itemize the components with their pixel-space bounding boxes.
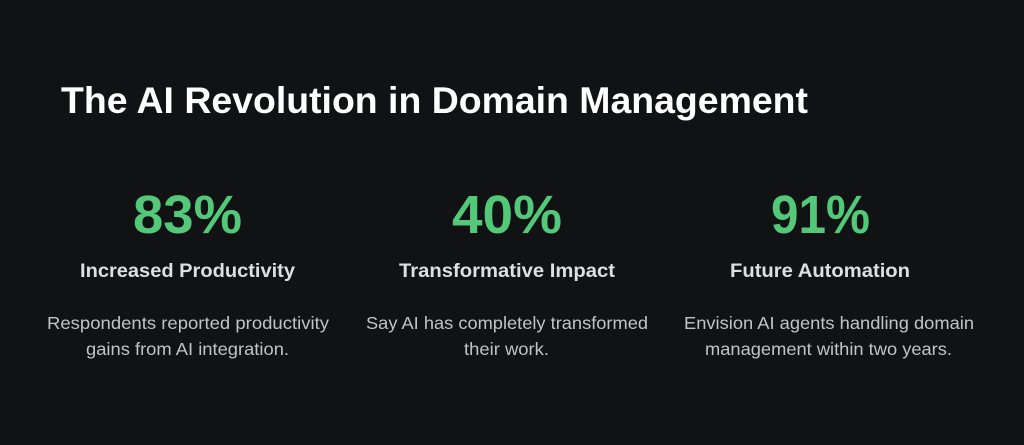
heading: transformative impact: Transformative Impact [399, 261, 616, 282]
heading: increased productivity: Increased Productivity [80, 261, 295, 282]
panel: increased productivity [47, 185, 329, 359]
title: The AI Revolution in Domain Management [61, 80, 808, 121]
stat: 91%: 91% [771, 185, 870, 245]
panel: transformative impact [366, 185, 648, 359]
description: productivity [47, 313, 329, 359]
panel: future automation [684, 185, 974, 359]
heading: future automation: Future Automation [730, 261, 910, 282]
description: future automation [684, 313, 974, 359]
description: productivity: Respondents reported productivity [47, 313, 329, 333]
stat: 40%: 40% [452, 185, 562, 245]
description: transformative impact [366, 313, 648, 359]
description: future automation: Envision AI agents handling domain [684, 313, 974, 333]
description: future automation: management within two years. [705, 339, 952, 359]
description: transformative impact: Say AI has completely transformed [366, 313, 648, 333]
description: transformative impact: their work. [464, 339, 549, 359]
stat: 83%: 83% [133, 185, 242, 245]
description: productivity: gains from AI integration. [86, 339, 289, 359]
